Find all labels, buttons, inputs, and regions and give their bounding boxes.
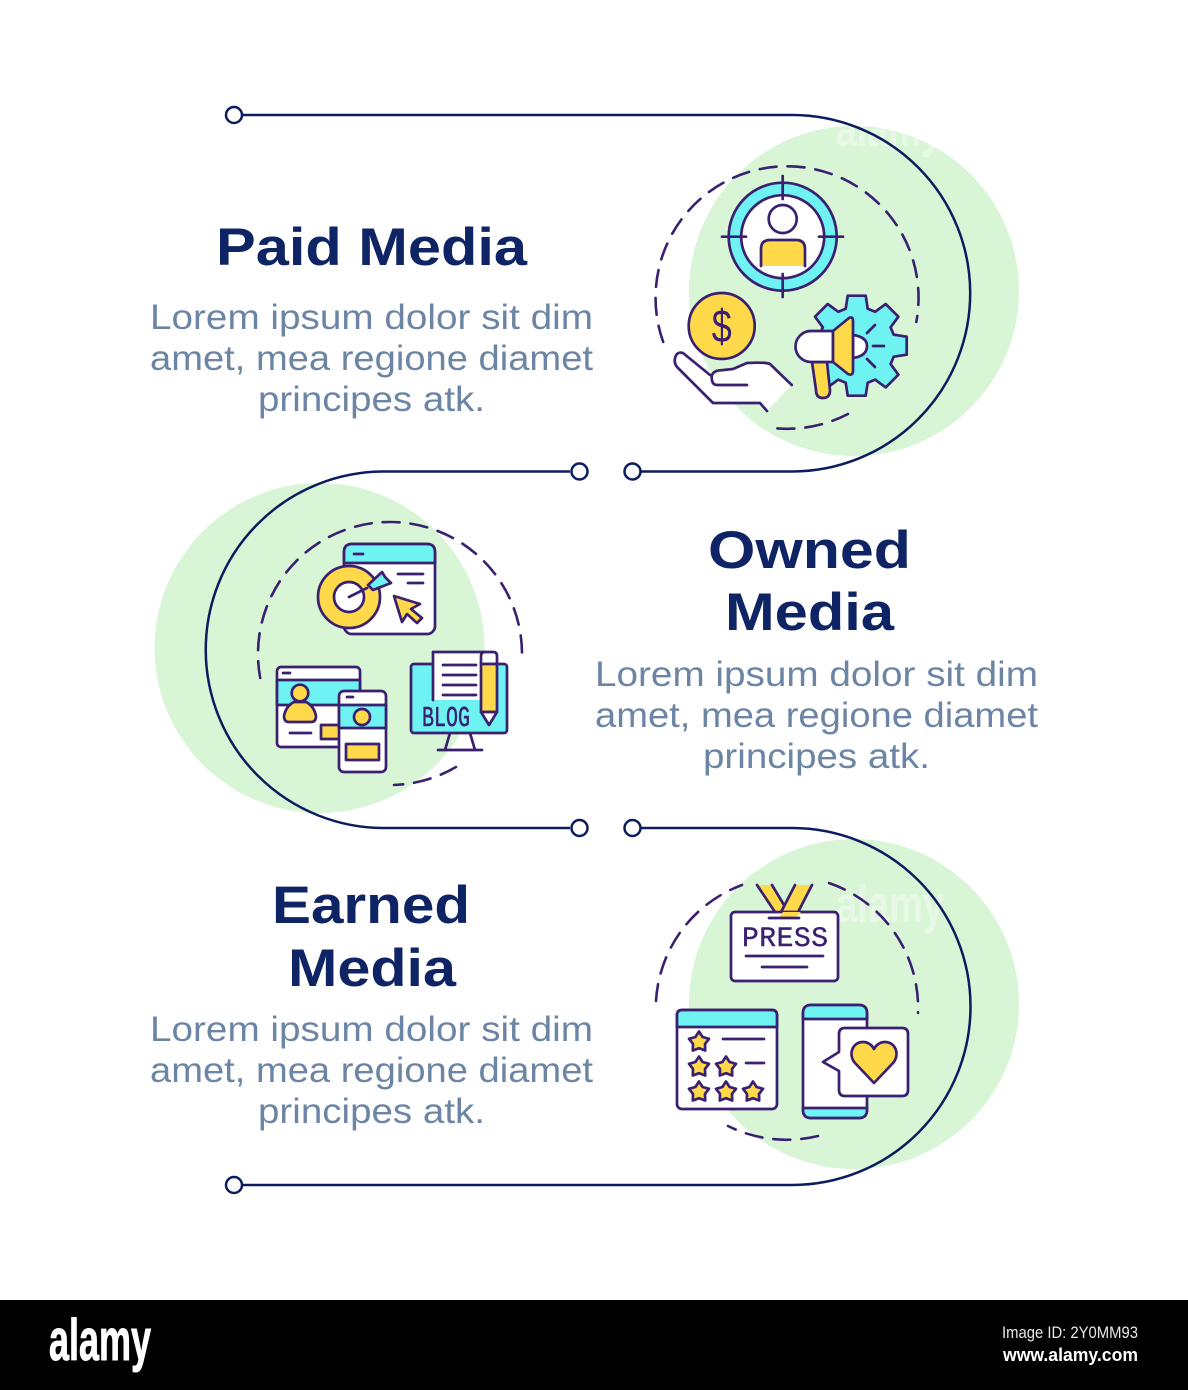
panel: owned media [154, 483, 1038, 813]
icon: coin on hand: $ [712, 300, 732, 352]
dashed ring: paid media [656, 166, 919, 429]
green circle: owned media [154, 483, 484, 813]
heading: earned media: Earned [272, 876, 470, 935]
text block: paid media: principes atk. [258, 380, 485, 419]
logo: alamy: alamy [49, 1308, 151, 1373]
icon: star ratings [677, 1010, 777, 1109]
heading: owned media [708, 521, 911, 642]
connector line: flowing timeline [206, 107, 971, 1193]
image id: Image ID: 2Y0MM93 [1002, 1323, 1138, 1342]
watermark: paid media: alamy [836, 100, 942, 158]
icon: press badge [731, 885, 838, 981]
dashed ring: owned media [258, 522, 522, 785]
dashed ring: earned media [656, 883, 918, 1140]
icon: blog monitor [411, 652, 507, 750]
text block: earned media: principes atk. [258, 1092, 485, 1131]
label: press: PRESS [742, 924, 828, 955]
icon: target on web page [318, 544, 435, 634]
panel: earned media [150, 839, 1019, 1169]
watermark: earned media: alamy [836, 876, 944, 934]
text block: owned media: principes atk. [703, 737, 930, 776]
heading: earned media [272, 876, 470, 998]
footer bar [0, 1300, 1188, 1390]
heading: paid media: Paid Media [216, 218, 528, 277]
text block: owned media: amet, mea regione diamet [595, 696, 1038, 735]
icon: target audience [722, 176, 843, 297]
heading: earned media: Media [288, 939, 457, 998]
green circle: paid media [689, 126, 1019, 456]
green circle: earned media [689, 839, 1019, 1169]
label: blog: BLOG [422, 702, 470, 735]
heading: owned media: Owned [708, 521, 911, 580]
text block: owned media: Lorem ipsum dolor sit dim [595, 655, 1038, 694]
panel: paid media [150, 100, 1019, 456]
text block: owned media [595, 655, 1038, 776]
icon: coin on hand [675, 293, 792, 411]
icon: megaphone and gear [795, 296, 907, 398]
text block: paid media: amet, mea regione diamet [150, 339, 593, 378]
website: www.alamy.com [1002, 1345, 1138, 1365]
heading: owned media: Media [725, 583, 895, 642]
text block: paid media [150, 298, 593, 419]
text block: earned media: amet, mea regione diamet [150, 1051, 593, 1090]
icon: phone with heart message [803, 1005, 908, 1118]
text block: paid media: Lorem ipsum dolor sit dim [150, 298, 593, 337]
text block: earned media: Lorem ipsum dolor sit dim [150, 1010, 593, 1049]
text block: earned media [150, 1010, 593, 1131]
icon: profile pages [277, 667, 386, 772]
